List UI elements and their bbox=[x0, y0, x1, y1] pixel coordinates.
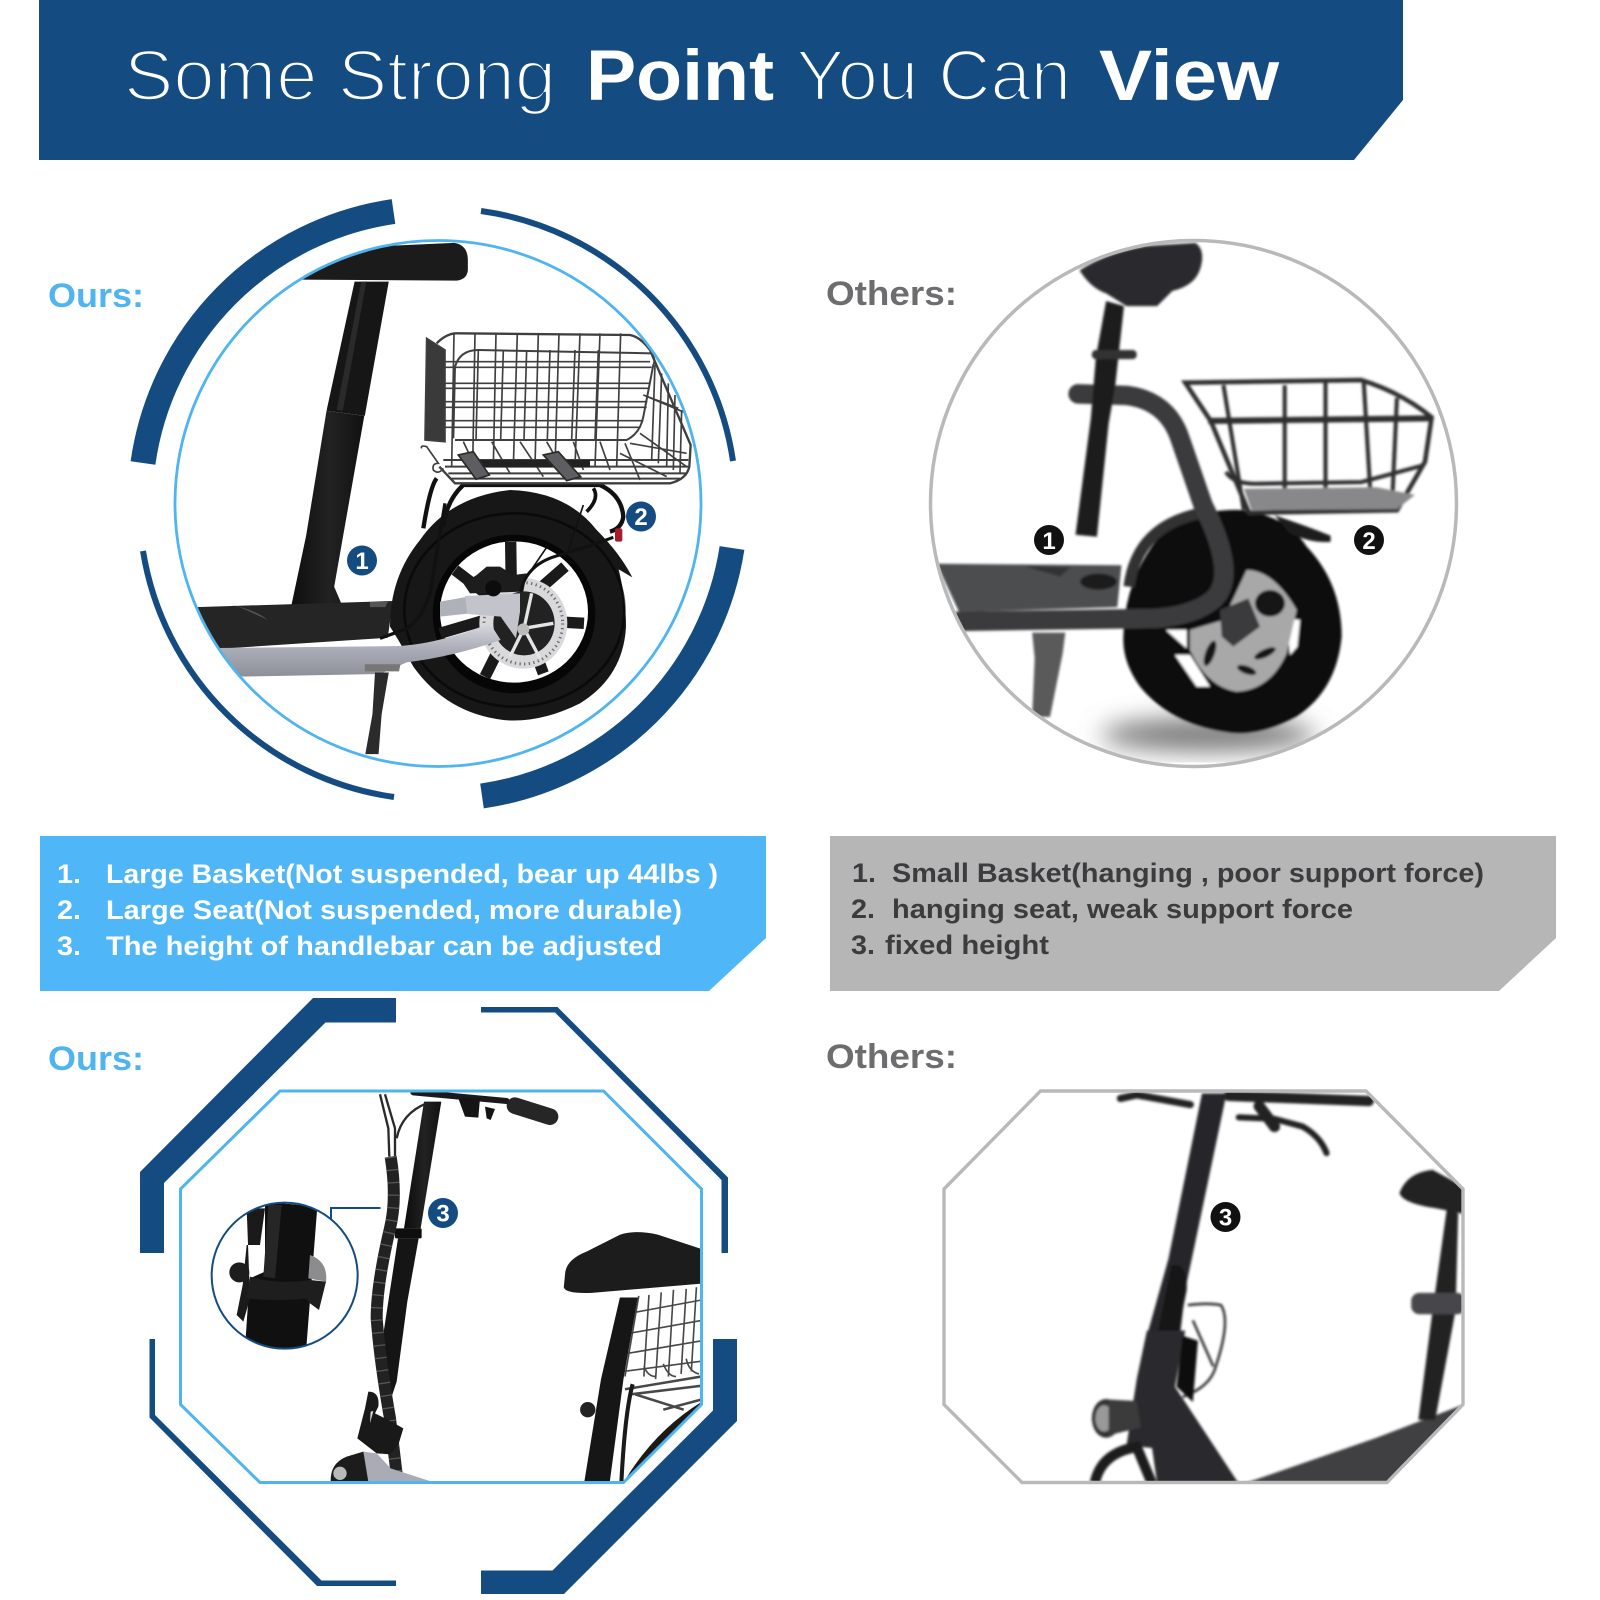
basket rails bbox=[445, 362, 652, 427]
seat post bbox=[292, 282, 389, 604]
title text bbox=[124, 37, 1280, 116]
feature text lines: Large Seat(Not suspended, more durable) bbox=[106, 895, 682, 925]
marker 1 bbox=[1034, 525, 1064, 555]
rack plates bbox=[458, 452, 581, 481]
lower head tube and frame bbox=[1127, 1331, 1239, 1484]
kickstand bbox=[365, 664, 401, 754]
latch bbox=[1157, 1265, 1187, 1336]
knob bbox=[229, 1262, 249, 1282]
rack and cables bbox=[380, 478, 623, 638]
small basket bbox=[1185, 380, 1432, 513]
footboard bbox=[937, 564, 1121, 612]
panel: ours octagon detail bbox=[140, 998, 737, 1594]
basket wires bbox=[623, 1287, 702, 1410]
marker 1: 1 bbox=[355, 548, 369, 575]
ground shadow bbox=[1101, 718, 1315, 751]
title text: Point bbox=[586, 37, 774, 116]
fender tail bbox=[1274, 515, 1331, 542]
marker 1: 1 bbox=[1042, 528, 1056, 555]
feature text lines: 1. bbox=[57, 859, 81, 889]
spokes bbox=[440, 542, 584, 677]
heading: others top: Others: bbox=[826, 275, 957, 313]
outer arc segments bbox=[143, 211, 733, 797]
feature text lines: 3. bbox=[57, 931, 81, 961]
far seat bbox=[1399, 1170, 1466, 1214]
inset connector line bbox=[331, 1208, 380, 1220]
spiral cable wrap bbox=[377, 1157, 397, 1480]
kickstand bbox=[1032, 633, 1065, 717]
panel: others feature list bbox=[830, 836, 1556, 991]
lower stem bbox=[383, 1238, 419, 1402]
blurred scooter rear with small basket bbox=[937, 243, 1432, 751]
panel: ours circular detail bbox=[143, 211, 733, 797]
basket floor bbox=[443, 460, 688, 479]
marker 2 bbox=[626, 502, 656, 532]
feature text lines bbox=[57, 859, 718, 961]
rack stay and fender bbox=[621, 1384, 704, 1481]
post clamp bbox=[1092, 350, 1137, 359]
fender arc bbox=[1129, 513, 1203, 587]
rear axle tube bbox=[440, 597, 470, 617]
frame tube bbox=[958, 394, 1224, 621]
marker 2: 2 bbox=[634, 504, 648, 531]
seat bbox=[298, 243, 468, 281]
wire basket bbox=[421, 333, 691, 483]
seat post bbox=[1076, 301, 1124, 537]
feature text lines: 1. bbox=[852, 858, 876, 888]
scooter handlebar and seat bbox=[331, 1092, 704, 1483]
blurred scooter handlebar bbox=[1092, 1093, 1466, 1484]
tube body bbox=[245, 1202, 317, 1352]
handlebars and brake lever bbox=[1120, 1095, 1369, 1153]
far clamp bbox=[1411, 1293, 1465, 1314]
floor rails bbox=[480, 460, 590, 467]
seat bbox=[564, 1232, 702, 1293]
saddle bbox=[1080, 243, 1202, 306]
footboard plates bbox=[231, 602, 388, 620]
brake bracket bbox=[465, 593, 520, 638]
far seat post bbox=[1418, 1208, 1458, 1420]
basket right end bbox=[620, 365, 687, 477]
headlight bbox=[331, 1452, 368, 1482]
footboard bbox=[196, 601, 393, 649]
tube collar bbox=[237, 1208, 265, 1322]
feature text lines: fixed height bbox=[885, 930, 1049, 960]
marker 3 bbox=[1210, 1202, 1240, 1232]
deck bbox=[1244, 1405, 1463, 1484]
wheel bbox=[1123, 510, 1342, 733]
basket rims bbox=[437, 333, 691, 483]
handlebar assembly bbox=[331, 1092, 550, 1482]
hub bracket bbox=[1220, 598, 1260, 647]
panel: ours feature list bbox=[40, 836, 766, 991]
panel: others circular detail bbox=[930, 240, 1456, 766]
caliper bbox=[463, 567, 527, 593]
title text: View bbox=[1099, 37, 1280, 116]
black rim bbox=[433, 535, 595, 693]
feature text lines: 2. bbox=[851, 894, 875, 924]
silver headset bbox=[363, 1452, 432, 1482]
brake disc bbox=[1190, 570, 1297, 692]
silver clamp interior bbox=[308, 1255, 326, 1282]
marker 3: 3 bbox=[1219, 1204, 1232, 1232]
marker 2: 2 bbox=[1362, 528, 1376, 555]
folding latch bbox=[357, 1392, 403, 1454]
marker 2 bbox=[1354, 525, 1384, 555]
feature text lines: Large Basket(Not suspended, bear up 44lbs ) bbox=[106, 859, 718, 889]
marker 3 bbox=[428, 1198, 458, 1228]
inner circle outline bbox=[175, 240, 701, 766]
basket floor bbox=[1244, 487, 1415, 510]
handlebar bar and grip bbox=[413, 1092, 550, 1117]
outer octagon segments bbox=[140, 998, 737, 1594]
fork bbox=[1095, 1447, 1152, 1484]
inner octagon outline bbox=[944, 1091, 1463, 1482]
heading: others bottom: Others: bbox=[826, 1038, 957, 1076]
rear wheel bbox=[217, 478, 632, 720]
clamp ring bbox=[247, 1277, 326, 1310]
marker 1 bbox=[347, 546, 377, 576]
basket hook bbox=[421, 446, 443, 472]
title banner bbox=[39, 0, 1403, 160]
tyre groove bbox=[404, 513, 624, 707]
heading: ours top: Ours: bbox=[48, 277, 144, 315]
wire loop bbox=[1183, 1304, 1225, 1397]
upper stem bbox=[404, 1102, 441, 1228]
stem bbox=[1147, 1093, 1227, 1336]
heading: ours bottom: Ours: bbox=[48, 1040, 144, 1078]
rim windows bbox=[1166, 618, 1300, 687]
brake levers bbox=[458, 1098, 495, 1120]
title text: You Can bbox=[796, 37, 1071, 116]
zoom inset: height clamp bbox=[212, 1202, 358, 1352]
headlight bbox=[1092, 1399, 1141, 1438]
basket uprights bbox=[452, 333, 621, 467]
feature text lines: hanging seat, weak support force bbox=[892, 894, 1353, 924]
inner circle outline bbox=[930, 240, 1456, 766]
basket side panel bbox=[425, 338, 445, 442]
feature text lines: The height of handlebar can be adjusted bbox=[106, 931, 662, 961]
adjustment knob bbox=[580, 1402, 595, 1417]
feature text lines: 2. bbox=[57, 895, 81, 925]
scooter rear with large basket bbox=[196, 243, 691, 754]
title text: Some Strong bbox=[124, 37, 556, 116]
thin cables bbox=[380, 1094, 427, 1157]
feature text lines: Small Basket(hanging , poor support force) bbox=[892, 858, 1484, 888]
tyre and fender bbox=[390, 490, 632, 720]
feature text lines: 3. bbox=[851, 930, 875, 960]
panel: others octagon detail bbox=[944, 1091, 1466, 1484]
footboard tube bbox=[217, 623, 501, 677]
brake disc bbox=[479, 578, 567, 669]
inner octagon outline bbox=[180, 1091, 702, 1482]
marker 3: 3 bbox=[436, 1200, 450, 1228]
seat post bbox=[584, 1297, 638, 1483]
feature text lines bbox=[851, 858, 1484, 960]
tail light bbox=[615, 528, 622, 542]
stem clamp bbox=[395, 1228, 422, 1238]
